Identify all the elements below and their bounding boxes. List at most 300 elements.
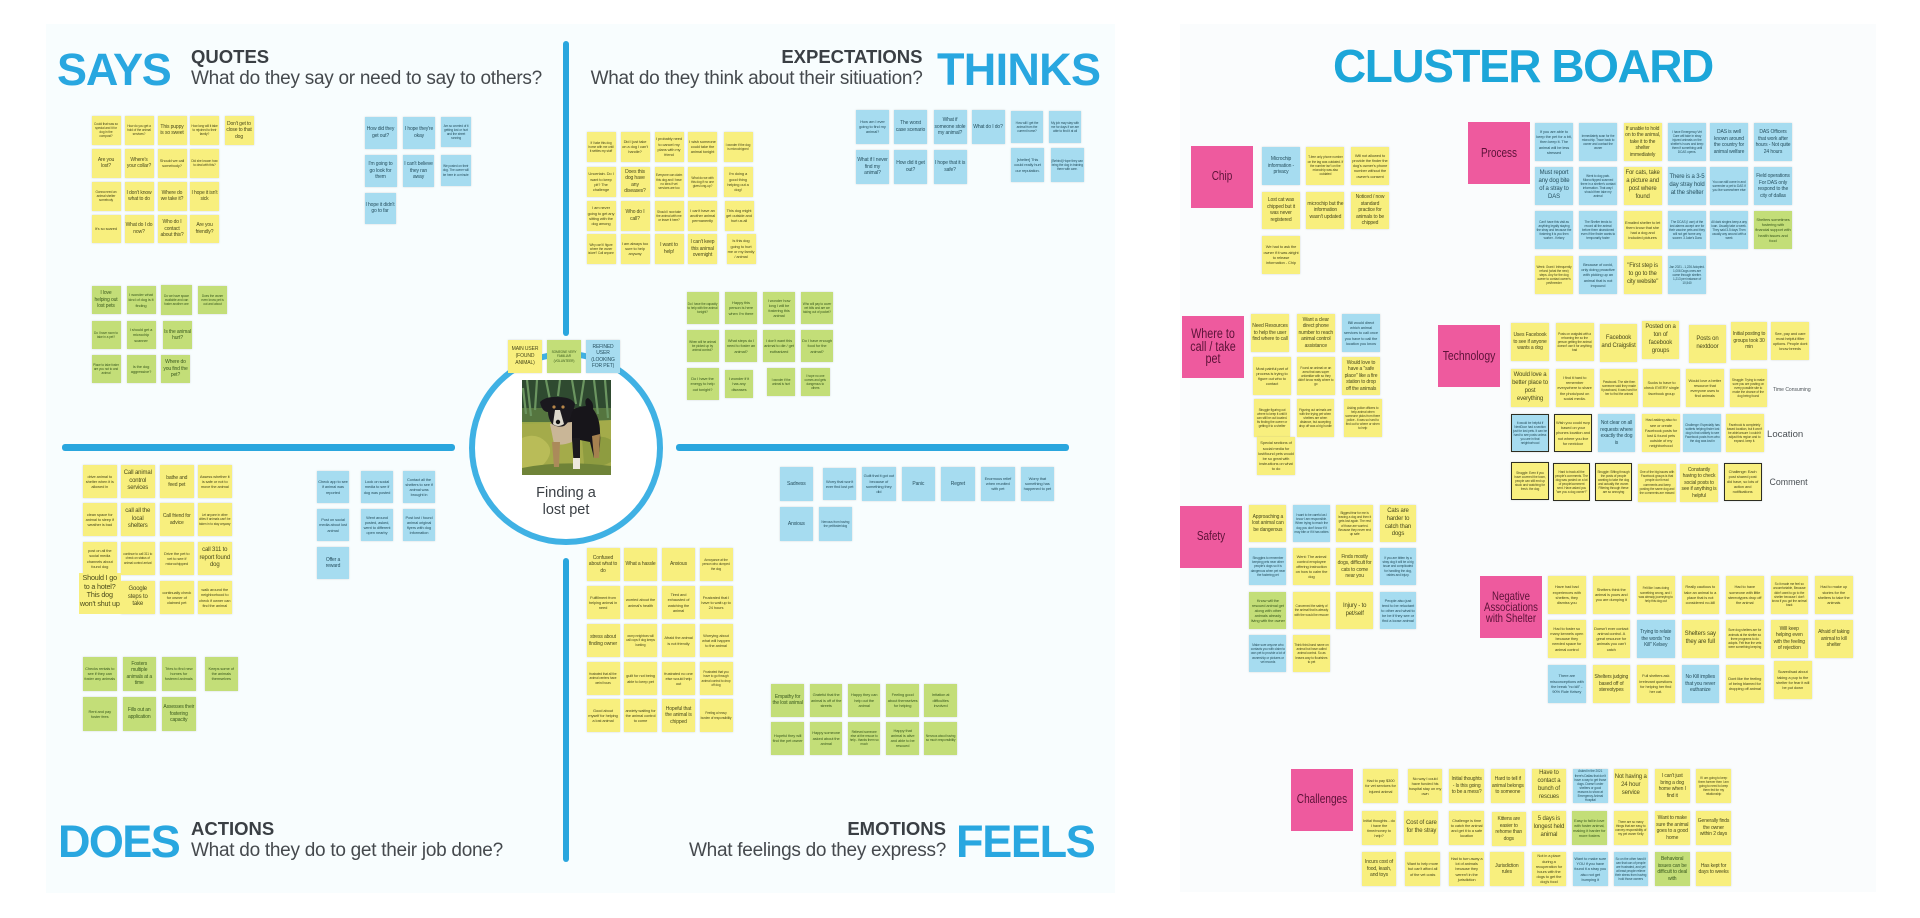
Challenges notes: Had to turn away a lot of animals because they weren't in the jurisdiction xyxy=(1451,856,1483,882)
Challenges notes xyxy=(1362,768,1732,886)
SAYS yellow notes: How long will it take to rejoined to their family? xyxy=(191,124,218,136)
THINKS blue notes: I hope that it is safe? xyxy=(935,160,965,173)
SAYS question: What do they say or need to say to others? xyxy=(191,68,542,89)
Challenges notes: Want to make sure the animal goes to a good home xyxy=(1656,815,1688,840)
FEELS yellow notes: frustrated no one else would help out xyxy=(664,671,693,686)
Technology notes: Struggle: Sifting through the posts of people wanting to take the dog and actually the owner. Filtering through these are so annoying xyxy=(1597,470,1630,494)
Process notes: All dark singles keep a any loan. Usually take a week. They said 3-5 days Then usually any around with a week xyxy=(1711,220,1747,240)
Technology notes: Struggle: Trying to make sure you are posting on every possible site to make the chance of the dog being found xyxy=(1732,378,1765,398)
Negative Associations notes: Really cautious to take an animal to a place that is not considered no-kill xyxy=(1684,584,1716,605)
DOES yellow notes: post on all the social media channels about found dog xyxy=(87,548,113,569)
SAYS yellow notes: I don't know what to do xyxy=(126,190,152,202)
category: Negative Associations with Shelter: with Shelter xyxy=(1486,610,1536,624)
Chip notes: T-free only phone number on the tag was outdated. If the number isn't on the microchip was also outdated xyxy=(1308,155,1343,176)
SAYS blue notes: Am so worried of it getting lost or hurt and the street running xyxy=(444,124,468,140)
THINKS green notes: I don't want this animal to die / get euthanized xyxy=(764,338,794,354)
THINKS blue notes: The worst case scenario xyxy=(896,120,925,133)
Negative Associations notes: Had to make up stories for the shelters to take the animals xyxy=(1818,584,1850,605)
Safety notes: Struggles to remember keeping pets near other people's dogs so it is dangerous when pet near the fostering pet xyxy=(1251,556,1285,577)
Where to call notes: Asking police officers to help animal when someone picks from there police - it was so hard to find out to where or when to help xyxy=(1345,406,1380,430)
Technology notes: Facebook and Craigslist xyxy=(1601,335,1636,348)
Challenges notes: Have to contact a bunch of rescues xyxy=(1537,770,1560,800)
cluster board title: CLUSTER BOARD xyxy=(1333,40,1713,92)
Where to call notes: Want a clear direct phone number to reach animal control assistance xyxy=(1299,317,1333,349)
Where to call notes: Would love to have a "safe place" like a fire station to drop off the animals xyxy=(1345,360,1377,392)
FEELS yellow notes: Frustrated that I have to wait up to 24 hours xyxy=(701,595,731,610)
FEELS blue notes: Enormous relief when reunited with pet xyxy=(985,476,1011,491)
SAYS yellow notes: Are you friendly? xyxy=(196,222,213,235)
DOES yellow notes: bathe and feed pet xyxy=(166,475,187,488)
Challenges notes: Initial thoughts - do I have the time/money to help? xyxy=(1363,818,1395,838)
Process notes: If you are able to keep the pet for a bit, then keep it. The animal will be less stressed xyxy=(1536,129,1572,155)
THINKS yellow notes: I want to help! xyxy=(660,242,678,255)
Negative Associations notes: Full shelters ask irrelevant questions for helping her find her cat. xyxy=(1639,673,1672,694)
Challenges notes: Incurs cost of food, leash, and toys xyxy=(1365,859,1393,878)
FEELS yellow notes: Annoyance at the person who dumped the dog xyxy=(702,558,730,571)
Challenges notes: Hard to tell if animal belongs to someone xyxy=(1492,776,1524,795)
THINKS yellow notes: I am never going to get any sitting with the dog among xyxy=(588,205,614,226)
Challenges notes: Not having a 24 hour service xyxy=(1615,774,1647,796)
SAYS yellow notes: Where do we take it? xyxy=(161,190,183,202)
category: Safety xyxy=(1180,506,1242,568)
FEELS yellow notes: Afraid the animal is not friendly xyxy=(664,635,693,646)
Technology notes: One of the big issues with Facebook groups is that people don't read comments and keep posting the same dog and the comments are missed xyxy=(1640,470,1674,495)
Chip notes xyxy=(1262,146,1390,274)
THINKS yellow notes: If I take this dog home with me until it settles my stuff xyxy=(588,141,614,153)
FEELS blue notes: Regret xyxy=(951,480,965,486)
Safety notes: Cats are harder to catch than dogs xyxy=(1385,508,1411,537)
Safety notes: Make sure anyone who contacts you with claim to own pet to provide a lot of ownership or pictures or vet records xyxy=(1251,643,1285,664)
Technology notes: Challenge: Especially has sublets helping finder lost dog is that unlikely to see Facebook posts from who the dog was lost in xyxy=(1685,423,1720,443)
Negative Associations notes: Felt like I was doing something wrong, and I was already journeying to help this dog out xyxy=(1639,586,1673,603)
Where to call notes: Most painful part of process is trying to figure out who to contact xyxy=(1256,366,1288,386)
Chip notes: Microchip information - privacy xyxy=(1268,156,1294,175)
Process notes xyxy=(1534,122,1792,294)
Chip notes: We had to ask the owner if it was alright to release information - Chip xyxy=(1263,244,1299,265)
Process notes: Field operations For DAS only respond to the city of dallas xyxy=(1756,173,1790,198)
FEELS blue notes: Anxious xyxy=(788,520,805,526)
Safety notes xyxy=(1248,504,1416,672)
Challenges notes: Easy to fall in love with foster animal, making it harder for more fosters xyxy=(1573,818,1605,838)
Safety notes: I want to be careful as I know I am responsible. When trying to reach the dog you don't know if it may bite or if it has rabies xyxy=(1294,513,1329,534)
FEELS yellow notes: Good about myself for helping a lost animal xyxy=(588,708,618,723)
Process notes: "First step is to go to the city website" xyxy=(1627,263,1658,285)
DOES question: What do they do to get their job done? xyxy=(191,840,503,861)
FEELS green notes: Relieved someone else at the rescue to help - thanks them so much xyxy=(850,730,879,746)
SAYS yellow notes: This puppy is so sweet xyxy=(160,124,184,136)
category: Negative Associations with Shelter: Negative xyxy=(1492,588,1530,602)
THINKS blue notes: What if someone stole my animal? xyxy=(935,117,965,136)
THINKS green notes: I wonder if it has any diseases xyxy=(729,376,749,392)
THINKS yellow notes xyxy=(586,132,756,264)
THINKS yellow notes: I can't keep this animal overnight xyxy=(691,239,714,258)
SAYS yellow notes: Don't get to close to that dog xyxy=(226,120,252,140)
Challenges notes: 5 days is longest held animal xyxy=(1534,816,1564,838)
FEELS green notes: Nervous about having so much responsibility xyxy=(926,734,955,742)
DOES yellow notes: clean space for animal to sleep if weather is bad xyxy=(86,512,114,527)
FEELS green notes: Happy they can help out the animal xyxy=(851,692,877,708)
Safety notes: If you are bitten by a stray dog it will be a big issue and complicated for handling the dog, rabies and injury. xyxy=(1382,556,1414,577)
FEELS green notes: Grateful that the animal is off of the streets xyxy=(811,692,841,708)
Technology notes: It would be helpful if NextDoor had a section just for lost pets. It can be hard to see posts unless you are in that neighborhood xyxy=(1513,421,1547,445)
ACTIONS subheading: ACTIONS xyxy=(191,818,274,839)
THINKS question: What do they think about their sitiuation? xyxy=(591,68,922,89)
DOES yellow notes: call 311 to report found dog xyxy=(199,547,230,568)
Process notes: Because of covid, only doing proactive with picking up an animal that is not impound xyxy=(1581,262,1615,288)
Where to call notes: Need Resources to help the user find where to call xyxy=(1252,323,1288,342)
SAYS blue notes: How did they get out? xyxy=(367,126,394,139)
FEELS blue notes xyxy=(780,466,1054,542)
Safety notes: Biggest fear for me is leaving a dog and then it gets lost again. The rest of those are worried. Because they never end up safe xyxy=(1338,511,1371,536)
SAYS yellow notes: Where's your collar? xyxy=(127,157,151,169)
THINKS yellow notes: I probably need to cancel my plans with my friend xyxy=(656,136,682,157)
center label: Finding a xyxy=(536,485,596,501)
Technology notes: Initial posting to groups took 30 min xyxy=(1733,331,1765,350)
SAYS green notes: I should get a microchip scanner xyxy=(130,327,152,343)
DOES yellow notes: continually check for owner of claimed pet xyxy=(162,590,191,605)
Challenges notes: Challenge is time to catch the animal and get it to a safe location xyxy=(1451,818,1482,838)
DOES green notes: Fills out an application xyxy=(128,707,151,720)
Process notes: Emailed shelter to let them know that she had a dog and included pictures xyxy=(1625,220,1660,240)
FEELS blue notes: Worry that won't ever find lost pet xyxy=(826,479,853,489)
Challenges notes: Jurisdiction rules xyxy=(1495,862,1519,875)
Technology notes: Had asking also to see or create Facebook posts for lost & found pets outside of my neighborhood xyxy=(1645,417,1677,448)
FEELS green notes: Irritation at difficulties involved xyxy=(932,692,949,708)
FEELS green notes: Happy that animal is alive and able to be rescued xyxy=(891,728,915,748)
THINKS yellow notes: Is this dog going to hurt me or my family / animal xyxy=(728,238,754,259)
Technology notes: Would love a better resource that everyone uses to find animals xyxy=(1688,378,1721,398)
Negative Associations notes: Sure dog shelters are for animals at the shelter so there programs to do adopts. Felt fear the vets were something keeping xyxy=(1728,628,1761,649)
FEELS green notes: Empathy for the lost animal xyxy=(772,694,803,706)
FEELS blue notes: Sadness xyxy=(787,480,806,486)
FEELS green notes xyxy=(770,684,958,756)
Negative Associations notes xyxy=(1548,576,1854,704)
Where to call notes: Special sections of social media for lost/found pets would be so great with instructions on what to do xyxy=(1258,440,1294,471)
SAYS yellow notes xyxy=(92,116,254,244)
THINKS green notes: I wonder if the animal is hurt xyxy=(772,378,790,386)
DOES blue notes xyxy=(316,470,436,580)
user type notes xyxy=(508,340,620,374)
THINKS yellow notes: I can't have an another animal permanently xyxy=(690,208,715,223)
FEELS yellow notes: Worrying about what will happen to the animal xyxy=(702,633,730,648)
Challenges notes: Generally finds the owner within 2 days xyxy=(1698,818,1729,837)
Safety notes: Went: The animal control employee offering instruction on how to calm the dog xyxy=(1296,554,1327,579)
front left leg xyxy=(552,442,560,467)
THINKS green notes: When will he animal be picked up by animal control? xyxy=(689,340,716,352)
vertical axis top xyxy=(563,41,569,336)
Technology notes: Struggle: Even if you have covered the town, people can still end up stuck and watching for fresh. the dog xyxy=(1514,471,1546,491)
Challenges notes: If I am going to keep them forever then I am going to need to keep them fed for my relationship xyxy=(1698,776,1729,796)
SAYS yellow notes: Are you lost? xyxy=(98,157,114,169)
Negative Associations notes: There are misconceptions with the break "no kill" - 90% Rule Kelsey xyxy=(1550,673,1584,694)
DOES green notes xyxy=(82,656,238,732)
THINKS green notes: I hope no one comes and gets dangerous to others xyxy=(805,374,826,390)
THINKS yellow notes: Why can't I figure where the owner is/are? Call anyone xyxy=(588,243,614,255)
Technology notes: Wish you could rsvp based on your phones location and not where you live for nextdoor xyxy=(1556,420,1590,446)
SAYS yellow notes: I hope it isn't sick xyxy=(191,190,218,202)
category: Process: Process xyxy=(1481,146,1517,160)
SAYS blue notes: I'm going to go look for them xyxy=(368,161,393,180)
THINKS yellow notes: I wonder if the dog is microchipped xyxy=(726,143,750,151)
THINKS blue notes: How am I ever going to find my animal? xyxy=(859,119,886,134)
FEELS yellow notes: Hopeful that the animal is chipped xyxy=(665,706,692,725)
THINKS green notes: Do I have the capacity to help with the animal tonight? xyxy=(688,302,717,314)
SAYS green notes: Is the dog aggressive? xyxy=(131,364,151,374)
FEELS yellow notes: Tired and exhausted of watching the animal xyxy=(668,592,689,613)
THINKS yellow notes: Who do I call? xyxy=(625,209,644,222)
Technology notes xyxy=(1510,320,1810,502)
FEELS yellow notes: Fulfillment from helping animal in need xyxy=(589,595,617,610)
THINKS green notes xyxy=(686,292,834,400)
THINKS blue notes: How did it get out? xyxy=(896,160,925,173)
icon: puppy photo xyxy=(522,380,611,475)
FEELS yellow notes: Confused about what to do xyxy=(589,555,617,574)
DOES green notes: Fosters multiple animals at a time xyxy=(127,661,152,686)
DOES green notes: Assesses their fostering capacity xyxy=(163,704,194,723)
Safety notes: Injury - to pet/self xyxy=(1343,603,1366,616)
QUOTES subheading: QUOTES xyxy=(191,46,269,67)
Process notes: Must report any dog bite of a stray to DAS xyxy=(1539,170,1569,200)
Process notes: Shelters sometimes fostering with financial support with health issues and food xyxy=(1755,217,1791,243)
THINKS yellow notes: Did I just take on a dog I can't handle? xyxy=(622,139,648,154)
SAYS yellow notes: Who do I contact about this? xyxy=(160,219,184,238)
THINKS green notes: Do I have the energy to help out tonight? xyxy=(691,376,714,392)
DOES yellow notes: Should I go to a hotel? This dog won't shut up xyxy=(80,573,120,608)
THINKS yellow notes: I am always too sure to help anyway xyxy=(622,241,648,256)
user type notes: SOMEONE VERY FAMILIAR (VOLUNTEER) xyxy=(552,350,576,363)
Challenges notes: Kittens are easier to rehome than dogs xyxy=(1495,816,1522,842)
Chip notes: Lost cat was chipped but it was never registered xyxy=(1267,197,1295,223)
Technology notes: Not clear on all requests where exactly the dog is xyxy=(1600,420,1633,446)
DOES yellow notes xyxy=(79,464,232,614)
DOES yellow notes: Assess whether it is safe or not to move the animal xyxy=(200,474,230,489)
FEELS heading: FEELS xyxy=(956,816,1095,867)
label: Comment: Comment xyxy=(1770,477,1808,487)
category: Process xyxy=(1468,122,1530,184)
THINKS yellow notes: Should I now take the animal with me or leave it here? xyxy=(656,210,682,222)
Technology notes: Hard to track all the people's comments. The dog was posted on a lot of people/comment sent. Have asked you "are you a dog owner?" xyxy=(1555,470,1588,494)
FEELS yellow notes: frustrated that all the animal centers have weird hours xyxy=(589,672,617,685)
FEELS yellow notes: Feeling a heavy burden of responsibility xyxy=(701,711,731,720)
category: Challenges xyxy=(1291,769,1353,831)
Technology notes: Posts on craigslist with a rehoming fee so the person getting the animal doesn't use it for anything bad xyxy=(1558,332,1592,352)
SAYS yellow notes: Gonna need an animal shelter somebody xyxy=(96,190,116,202)
FEELS blue notes: Guilt that it got out because of something they did xyxy=(864,473,894,494)
Negative Associations notes: Have had bad experiences with shelters, they dismiss you xyxy=(1553,584,1581,605)
chest xyxy=(550,422,572,445)
Process notes: DAS Officers that work after hours - Not quite 24 hours xyxy=(1756,129,1790,154)
EXPECTATIONS subheading: EXPECTATIONS xyxy=(781,46,922,67)
THINKS blue notes: What if I never find my animal? xyxy=(857,157,888,176)
Challenges notes: Has kept for days to weeks xyxy=(1699,862,1729,875)
category: Where to call / take pet: Where to xyxy=(1191,326,1235,341)
Negative Associations notes: Shelters say they are full xyxy=(1685,631,1716,645)
SAYS yellow notes: It's so scared xyxy=(95,226,117,231)
DOES yellow notes: call all the local shelters xyxy=(125,508,150,529)
DOES heading: DOES xyxy=(58,816,179,867)
DOES green notes: Rent and pay foster fees xyxy=(88,709,111,719)
THINKS green notes: Happy this person is here when I'm there xyxy=(729,300,753,316)
user type notes: REFINED USER (LOOKING FOR PET) xyxy=(591,344,615,369)
Challenges notes: Cost of care for the stray xyxy=(1406,820,1437,834)
Negative Associations notes: Scared/sad about taking a pup to the shelter for fear it will be put down xyxy=(1776,669,1809,690)
Challenges notes: I can't just bring a dog home when I find it xyxy=(1659,773,1686,798)
SAYS green notes: Do we have space available and can foster another one xyxy=(164,294,189,306)
FEELS yellow notes: stress about finding owner xyxy=(589,634,617,646)
Technology notes: Sucks to have to check EVERY single facebook group xyxy=(1644,380,1679,396)
Where to call notes: Struggle figuring out where to keep it until it can still be out located. Its finding the owner or getting it to a shelter xyxy=(1257,408,1287,428)
SAYS yellow notes: How do you get a hold of the animal services? xyxy=(127,124,151,136)
SAYS heading: SAYS xyxy=(57,44,171,95)
Negative Associations notes: Doesn't ever contact animal control. A great resource for animals you can't catch xyxy=(1594,626,1628,652)
SAYS green notes: Is the animal hurt? xyxy=(164,328,191,341)
Process notes: For cats, take a picture and post where found xyxy=(1625,170,1660,200)
DOES blue notes: Post on social media about lost animal xyxy=(319,517,347,533)
category: Where to call / take pet: pet xyxy=(1206,351,1221,366)
DOES yellow notes: Drive the pet to vet to see if microchipped xyxy=(164,551,190,566)
Challenges notes: Behavioral issues can be difficult to deal with xyxy=(1657,856,1687,882)
Process notes: There is a 3-5 day stray hold at the shelter xyxy=(1669,174,1705,196)
THINKS yellow notes: Uncertain. Do I want to keep pit? The challenge xyxy=(588,171,614,192)
Challenges notes: Asked in the 2021 there's Dallas that don't have a way to get those dogs. Doesn't order shelters or good reasons to show at Emergency Animal Hospital xyxy=(1574,769,1606,802)
SAYS green notes: I love helping out lost pets xyxy=(94,290,118,309)
Process notes: I have Emergency Vet Care will take in stray injured animals on the shelter's hours and keep them if something until DCAS opens. xyxy=(1671,130,1703,154)
Where to call notes xyxy=(1250,314,1382,476)
DOES yellow notes: Call animal control services xyxy=(124,470,152,491)
Process notes: Immediately scan for the microchip. Trace back to owner and contact the owner xyxy=(1582,134,1614,150)
Challenges notes: Initial thoughts - Is this going to be a mess? xyxy=(1452,776,1482,795)
center circle xyxy=(469,351,663,545)
FEELS blue notes: Nervous from having the pet/foster/dog xyxy=(821,520,849,528)
category: Chip: Chip xyxy=(1212,169,1232,183)
FEELS yellow notes: What a hassle xyxy=(625,561,656,567)
Process notes: Jan 2021 - 1,226 Adopted. 1,006 Dogs ones are came through shelter. 1,213 per instance of 10,540 xyxy=(1669,265,1705,285)
Technology notes: I find it hard to remember everywhere to share the photo/post on social media. xyxy=(1557,375,1592,401)
SAYS blue notes: I hope they're okay xyxy=(405,126,433,139)
EMOTIONS subheading: EMOTIONS xyxy=(847,818,946,839)
SAYS yellow notes: Did she known how to deal with this? xyxy=(191,159,218,167)
FEELS yellow notes xyxy=(586,548,734,732)
Technology notes: Posted on a ton of facebook groups xyxy=(1645,324,1676,354)
DOES blue notes: Contact all the shelters to see if animal was brought in xyxy=(405,477,433,497)
SAYS blue notes: I can't believe they ran away xyxy=(404,161,433,180)
label: Time Consuming: Time Consuming xyxy=(1773,387,1811,393)
Challenges notes: There are so many things that are easy to convey responsibility of my pet owner Kelly xyxy=(1615,820,1646,836)
THINKS blue notes: My job may stay with me for days if we are able to find it at all xyxy=(1051,121,1079,133)
THINKS blue notes: [shelter] This could really hurt our reputation. xyxy=(1014,157,1041,173)
FEELS blue notes: Panic xyxy=(912,480,924,486)
THINKS yellow notes: What do we with this dog if no one gives long-up? xyxy=(691,176,714,188)
Process notes: Week: Grant / Infrequently refund (what the new) steps. Any for the dog owner to contact owner's pet/breeder xyxy=(1536,265,1572,285)
DOES yellow notes: Call friend for advice xyxy=(163,513,191,526)
DOES blue notes: Look on social media to see if dog was posted xyxy=(364,479,390,495)
Negative Associations notes: So it made me feel so uncomfortable, Because didn't want to go to the shelter because I don't know if you got the animal back xyxy=(1772,582,1807,607)
Technology notes: Constantly having to check social posts to see if anything is helpful xyxy=(1682,467,1716,499)
Safety notes: Know will the rescued animal get along with other animals already living with the owner xyxy=(1251,598,1285,623)
center label xyxy=(536,485,596,518)
category: Negative Associations with Shelter xyxy=(1480,576,1542,638)
SAYS yellow notes: What do I do now? xyxy=(126,222,152,235)
FEELS question: What feelings do they express? xyxy=(689,840,946,861)
THINKS yellow notes: I'm doing a good thing helping out a dog! xyxy=(727,171,749,192)
DOES yellow notes: walk around the neighborhood to check if owner can find the animal xyxy=(199,587,230,608)
Negative Associations notes: Dont like the feeling of being blamed for dropping off animal xyxy=(1728,676,1761,691)
category: Technology xyxy=(1438,325,1500,387)
front right leg xyxy=(572,438,580,468)
Chip notes: Noticed / now standard practice for animals to be chipped xyxy=(1356,194,1384,226)
vertical axis bottom xyxy=(563,558,569,862)
Process notes: Can't have this visit as anything legally staying the stray and because the fostering it is you then worker - Kelsey xyxy=(1537,220,1571,240)
category: Chip xyxy=(1191,146,1253,208)
category: Where to call / take pet xyxy=(1182,316,1244,378)
body xyxy=(566,398,600,458)
FEELS blue notes: Worry that something has happened to pet xyxy=(1024,476,1051,491)
Safety notes: Finds mostly dogs, difficult for cats to come near you xyxy=(1338,554,1372,579)
THINKS yellow notes: I wish someone could take the animal tonight xyxy=(689,139,716,154)
Negative Associations notes: Will keep helping even with the feeling of rejection xyxy=(1774,626,1805,651)
SAYS blue notes: We posted on their dog. The owner will be here in a minute xyxy=(443,164,469,177)
FEELS green notes: Happy someone asked about the animal xyxy=(812,730,840,746)
Challenges notes: Want to make sure YOU if you have found it a stray you also not get bumping it xyxy=(1574,856,1606,882)
DOES blue notes: Check app to see if animal was reported xyxy=(318,479,348,495)
FEELS yellow notes: guilt for not being able to keep pet xyxy=(626,673,655,684)
Process notes: You can still come in and surrender a pet to DAS if you live somewhere else xyxy=(1712,180,1746,192)
SAYS yellow notes: Should we call somebody? xyxy=(160,158,184,168)
Challenges notes: Not in a place during a recuperation for hours with the dogs to get the dog's food xyxy=(1536,853,1562,884)
Technology notes: Uses Facebook to see if anyone wants a dog xyxy=(1513,332,1547,351)
DOES blue notes: Post lost / found animal original flyers with dog information xyxy=(406,515,432,535)
Negative Associations notes: Trying to relate the words "no Kill" Kelsey xyxy=(1640,629,1671,648)
horizontal axis left xyxy=(62,444,455,450)
Technology notes: Would love a better place to post everything xyxy=(1512,372,1548,402)
THINKS blue notes: What do I do? xyxy=(973,124,1003,130)
Technology notes: Posts on nextdoor xyxy=(1696,336,1719,350)
Negative Associations notes: No Kill implies that you never euthanize xyxy=(1685,674,1715,693)
horizontal axis right xyxy=(676,444,1069,450)
Challenges notes: Had to pay $300 for vet services for injured animal xyxy=(1365,778,1396,794)
head xyxy=(540,397,574,427)
SAYS green notes: I wonder what kind of dog is it finding xyxy=(128,292,153,308)
Where to call notes: Figuring out animals are with the trying pet when shelters are when distance, but accepting drop off was a big hurdle xyxy=(1299,408,1332,428)
Chip notes: microchip but the information wasn't updated xyxy=(1307,200,1343,220)
DOES green notes: Keeps some of the animals themselves xyxy=(209,666,234,681)
Negative Associations notes: Afraid of taking animal to kill shelter xyxy=(1818,629,1849,648)
THINKS yellow notes: Everyone can claim this dog and I have no idea if vet services are too xyxy=(656,173,682,190)
THINKS green notes: I wonder how long I will be fostering this animal xyxy=(768,298,790,318)
Safety notes: Think third-hand name on animal but have called animal control. So as leaves way to flourishes to pet xyxy=(1294,643,1329,664)
Process notes: Went to dog park. Microchipped scanned there in a shelter's contact information. That way I should then take my animal xyxy=(1581,174,1615,198)
Process notes: The Shelter tends to record all the animal before them abandoned even if the finder wants to temporarily foster xyxy=(1581,220,1615,240)
DOES yellow notes: continue to call 311 to check on status of animal control arrival xyxy=(123,552,152,565)
category: Where to call / take pet: call / take xyxy=(1191,339,1236,354)
Technology notes: See, pay and care most helpful filter options. People dont know breeds xyxy=(1773,331,1807,351)
SAYS green notes: Place to take foster are you not to and animal xyxy=(93,363,119,375)
DOES green notes: Tries to find new homes for fostered animals xyxy=(165,666,193,681)
THINKS green notes: What steps do I need to foster an animal? xyxy=(727,338,755,354)
FEELS yellow notes: worry neighbors will call cops if dog keeps barking xyxy=(626,634,655,647)
DOES blue notes: Offer a reward xyxy=(326,556,340,569)
SAYS blue notes xyxy=(364,116,472,224)
Challenges notes: So on the other hand it can that can of people are frustrated, and yet at least people relieve their stress from having hold those owners xyxy=(1615,857,1646,881)
FEELS yellow notes: Anxious xyxy=(670,561,687,567)
panel: empathy map xyxy=(46,24,1115,893)
FEELS green notes: Feeling good about themselves for helping xyxy=(888,692,918,708)
label: Location: Location xyxy=(1767,429,1803,440)
THINKS heading: THINKS xyxy=(937,44,1100,95)
THINKS yellow notes: Does this dog have any diseases? xyxy=(624,169,646,194)
SAYS green notes xyxy=(92,284,228,384)
center label: lost pet xyxy=(543,502,589,518)
